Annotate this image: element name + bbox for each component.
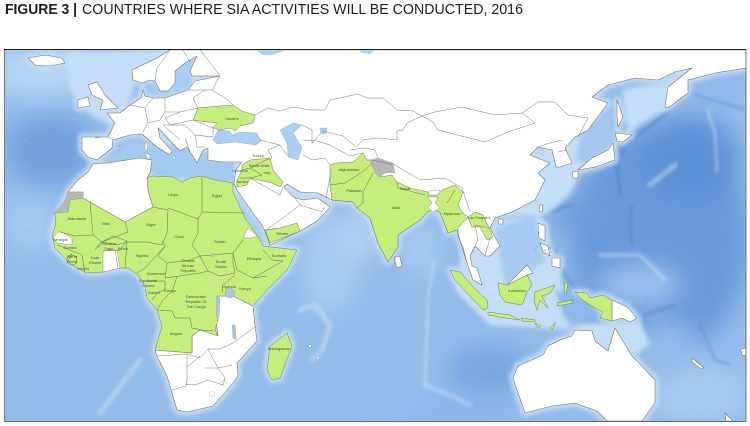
country labels: Africa: Leone xyxy=(66,259,78,264)
scattered islands xyxy=(24,139,708,359)
green countries: South Asia: Nepal xyxy=(400,186,410,191)
country labels: Africa: Gabon xyxy=(148,290,160,295)
country labels: Africa: Guinea xyxy=(142,283,155,288)
country labels: Africa: Republic xyxy=(180,268,196,273)
southern Africa borders xyxy=(157,327,255,390)
country labels: Africa: Liberia xyxy=(77,266,90,271)
green countries: Ukraine and Middle East xyxy=(193,105,283,187)
country labels: Africa: Sudan xyxy=(214,239,226,244)
country labels: Africa: Uganda xyxy=(222,284,237,289)
country labels: Africa: d'Ivoire xyxy=(89,260,102,265)
country labels: Africa: Central xyxy=(182,258,195,263)
country labels: Africa: Chad xyxy=(174,234,184,239)
country labels: Africa: Niger xyxy=(146,222,156,227)
country labels: Africa: Sierra xyxy=(67,254,78,259)
title: FIGURE 3 | xyxy=(5,2,77,18)
green countries: South Asia xyxy=(330,153,493,263)
country labels: Africa: Guinea xyxy=(64,245,77,250)
trenches xyxy=(550,92,746,365)
green countries: Indonesia: Indonesia xyxy=(508,288,526,293)
country labels: Africa: Yemen xyxy=(276,231,288,236)
green countries: Ukraine and Middle East: Iraq xyxy=(264,170,270,175)
green countries: South Asia: India xyxy=(392,205,401,210)
country labels: Africa: Cameroon xyxy=(147,271,165,276)
country labels: Africa: Senegal xyxy=(53,237,67,242)
country labels: Africa: Congo xyxy=(164,288,177,293)
green countries: South Asia: Myanmar xyxy=(444,211,461,216)
country labels: Africa: Somalia xyxy=(272,253,287,258)
country labels: Africa: Sudan xyxy=(215,264,227,269)
shallow seas xyxy=(65,50,680,355)
green countries: Ukraine and Middle East: Lebanon xyxy=(232,168,248,173)
country labels: Africa xyxy=(53,192,291,351)
green countries: South Asia: Afghanistan xyxy=(338,167,360,172)
country labels: Africa: Mauritania xyxy=(68,216,87,221)
country labels: Africa: Libya xyxy=(168,192,179,197)
green countries: Indonesia xyxy=(450,270,612,330)
country labels: Africa: Republic Of xyxy=(186,299,207,304)
title: COUNTRIES WHERE SIA ACTIVITIES WILL BE CONDUCTED, 2016 xyxy=(82,2,523,18)
country labels: Africa: The Congo xyxy=(186,304,207,309)
country labels: Africa: African xyxy=(182,263,194,268)
green countries: South Asia: Lao People's xyxy=(467,215,491,220)
country labels: Africa: Faso xyxy=(105,246,114,251)
country labels: Africa: Mali xyxy=(102,221,110,226)
green countries: Ukraine and Middle East: Syrian Arab xyxy=(249,163,270,168)
green countries: South Asia: Pakistan xyxy=(346,188,362,193)
green countries: Ukraine and Middle East: Ukraine xyxy=(225,116,240,121)
ridges xyxy=(100,110,717,413)
country labels: Africa: Democratic xyxy=(186,294,206,299)
country labels: Africa: Madagascar xyxy=(268,346,291,351)
country labels: Africa: Kenya xyxy=(239,286,251,291)
green countries: Ukraine and Middle East: Turkey xyxy=(252,153,264,158)
country labels: Africa: Nigeria xyxy=(136,253,149,258)
disputed grey territory xyxy=(54,192,83,213)
country labels: Africa: Benin xyxy=(118,246,128,251)
country labels: Africa: Egypt xyxy=(212,193,223,198)
inland seas xyxy=(213,50,375,160)
country labels: Africa: South xyxy=(216,259,226,264)
country labels: Africa: Cote xyxy=(91,255,100,260)
lakes xyxy=(209,254,236,397)
country labels: Africa: Burkina xyxy=(102,241,117,246)
country labels: Africa: Equatorial xyxy=(139,278,157,283)
internal borders: Europe and Asia xyxy=(95,50,588,256)
green countries: Africa xyxy=(52,176,300,397)
national borders xyxy=(58,177,283,331)
green countries: Ukraine and Middle East: Jordan xyxy=(236,179,248,184)
country labels: Africa: Angola xyxy=(170,331,183,336)
country labels: Africa: Ethiopia xyxy=(247,256,262,261)
